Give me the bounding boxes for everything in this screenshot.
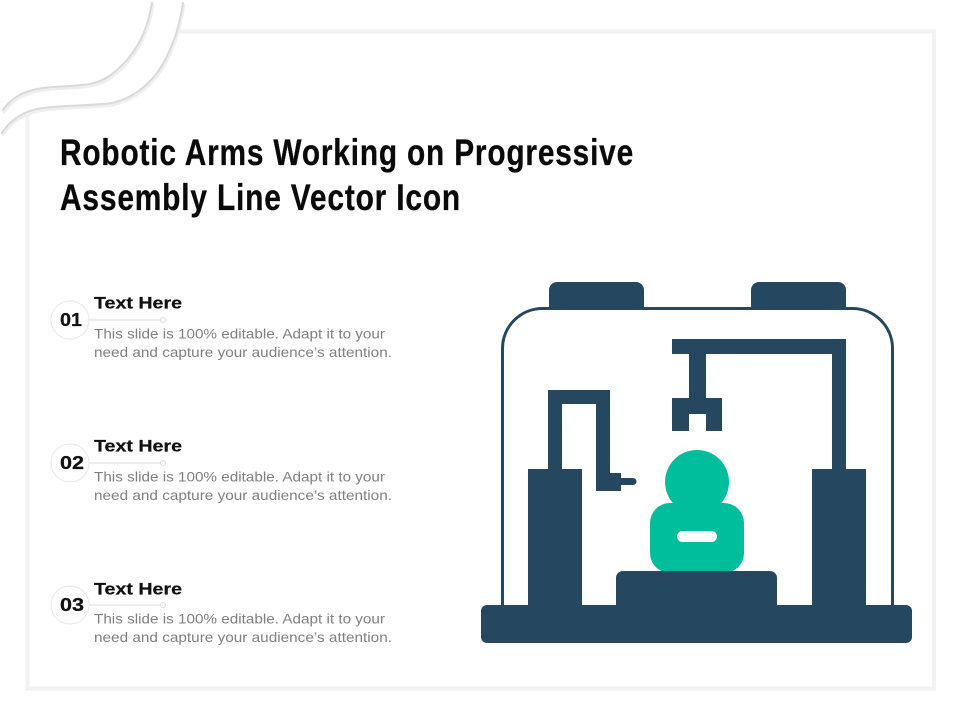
title: Assembly Line Vector Icon — [60, 177, 461, 218]
top mounting tabs — [549, 282, 846, 308]
description 03: need and capture your audience’s attention. — [94, 629, 392, 645]
title — [60, 132, 634, 218]
list item 03 — [51, 580, 392, 645]
heading 03: Text Here — [94, 580, 182, 598]
list item 02 — [51, 436, 392, 503]
number badge 01: 01 — [60, 310, 82, 330]
enclosure outline — [502, 308, 892, 612]
description 01: need and capture your audience’s attention. — [94, 344, 392, 360]
description 03 — [94, 610, 392, 645]
decorative corner curves — [2, 3, 184, 135]
number badge 01 — [51, 301, 166, 339]
right overhead robotic arm — [672, 339, 866, 609]
number badge 03 — [51, 586, 166, 624]
teal workpiece robot — [650, 450, 744, 573]
left robotic arm — [528, 390, 636, 609]
icon: robotic arms assembly line — [481, 282, 912, 643]
description 02 — [94, 468, 392, 503]
number badge 02: 02 — [60, 453, 84, 473]
description 02: This slide is 100% editable. Adapt it to your — [94, 468, 385, 484]
heading 02: Text Here — [94, 436, 182, 456]
list item 01 — [51, 294, 392, 360]
description 01: This slide is 100% editable. Adapt it to your — [94, 326, 385, 342]
heading 01: Text Here — [94, 294, 182, 312]
title: Robotic Arms Working on Progressive — [60, 132, 634, 173]
number badge 03: 03 — [60, 595, 84, 615]
number badge 02 — [51, 444, 166, 482]
description 02: need and capture your audience’s attention. — [94, 487, 392, 503]
pedestal — [616, 571, 777, 606]
description 01 — [94, 326, 392, 360]
description 03: This slide is 100% editable. Adapt it to your — [94, 610, 385, 626]
base platform — [481, 605, 912, 643]
